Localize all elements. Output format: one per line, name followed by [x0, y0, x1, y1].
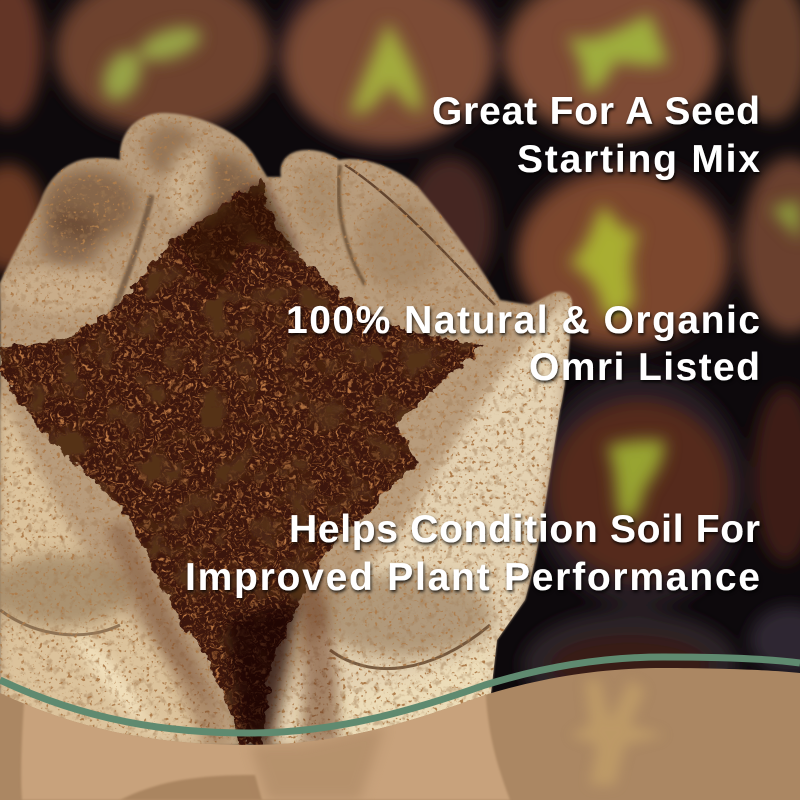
benefit: natural and organic — [286, 299, 760, 389]
green wave line — [0, 657, 800, 733]
benefit: natural and organic: Omri Listed — [529, 346, 760, 389]
gloved hands holding soil — [0, 112, 574, 745]
dark hollow at bottom of the hands — [225, 600, 300, 745]
faded plant seen through band — [579, 681, 651, 786]
benefit: soil conditioning — [185, 508, 760, 599]
benefit: soil conditioning: Helps Condition Soil For — [289, 508, 760, 551]
glove base — [0, 113, 572, 745]
glove seen through band — [20, 695, 510, 800]
soil specks seen through band — [252, 729, 382, 799]
finger shadow over soil — [175, 180, 300, 290]
soil mound — [0, 170, 500, 750]
benefit: natural and organic: 100% Natural & Organic — [286, 299, 760, 342]
benefit: seed starting: Great For A Seed — [432, 90, 760, 133]
benefit: seed starting — [432, 90, 760, 181]
benefit: seed starting: Starting Mix — [517, 138, 760, 181]
text blocks — [185, 90, 760, 599]
shadow in band — [120, 775, 262, 800]
benefit: soil conditioning: Improved Plant Performance — [185, 556, 760, 599]
bottom tan wave band — [0, 668, 800, 800]
glove shading and creases — [0, 114, 572, 745]
